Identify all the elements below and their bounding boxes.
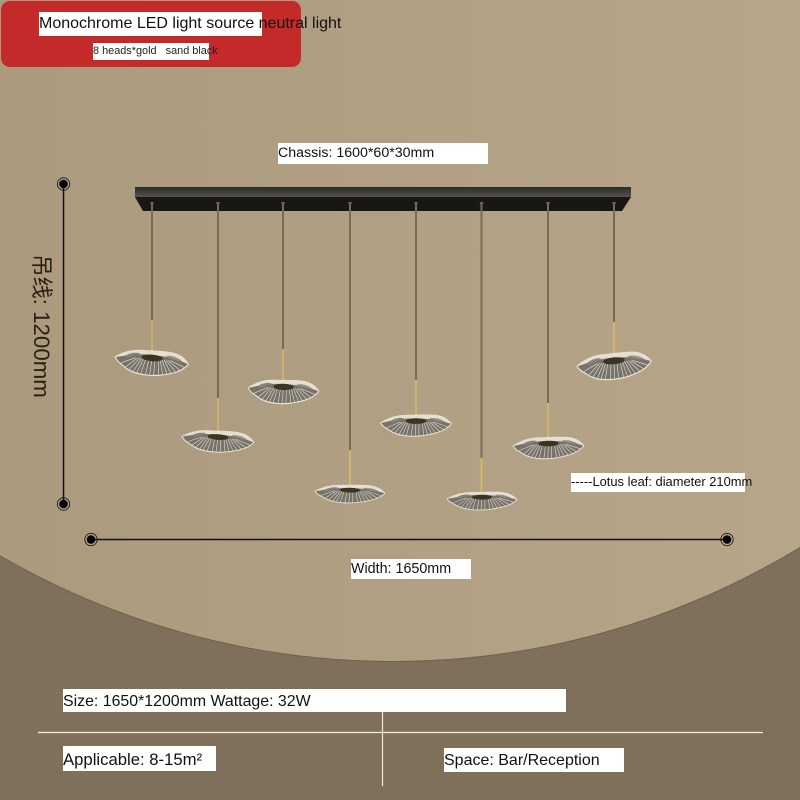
lotus leaf label box (571, 473, 745, 492)
subtitle label (93, 43, 209, 60)
lamp 1 (114, 205, 189, 379)
title text: Monochrome LED light source neutral light (39, 15, 341, 32)
size and wattage box (63, 689, 566, 712)
space text: Space: Bar/Reception (444, 752, 600, 769)
space box (444, 748, 624, 772)
title label (39, 12, 262, 36)
lamp 3 (248, 205, 319, 405)
lamp 4 (315, 205, 385, 504)
lamp 8 (576, 205, 652, 382)
ceiling chassis bar (135, 187, 631, 211)
applicable area box (63, 746, 216, 771)
lamp 5 (381, 205, 451, 436)
width text: Width: 1650mm (351, 561, 451, 577)
lamp 7 (513, 205, 584, 459)
height dimension line (57, 178, 70, 510)
cord length label: 吊线: 1200mm (29, 254, 54, 398)
lotus leaf text: -----Lotus leaf: diameter 210mm (571, 474, 752, 489)
red title banner (1, 1, 301, 67)
width dimension line (85, 533, 733, 546)
subtitle text: 8 heads*gold sand black (93, 45, 218, 57)
applicable area text: Applicable: 8-15m² (63, 750, 202, 769)
chassis label (278, 143, 488, 164)
lamp 6 (447, 205, 517, 510)
spec table dividers (38, 712, 763, 786)
size and wattage text: Size: 1650*1200mm Wattage: 32W (63, 693, 311, 710)
chassis text: Chassis: 1600*60*30mm (278, 145, 434, 161)
lamp 2 (181, 205, 254, 455)
width label box (351, 559, 471, 579)
